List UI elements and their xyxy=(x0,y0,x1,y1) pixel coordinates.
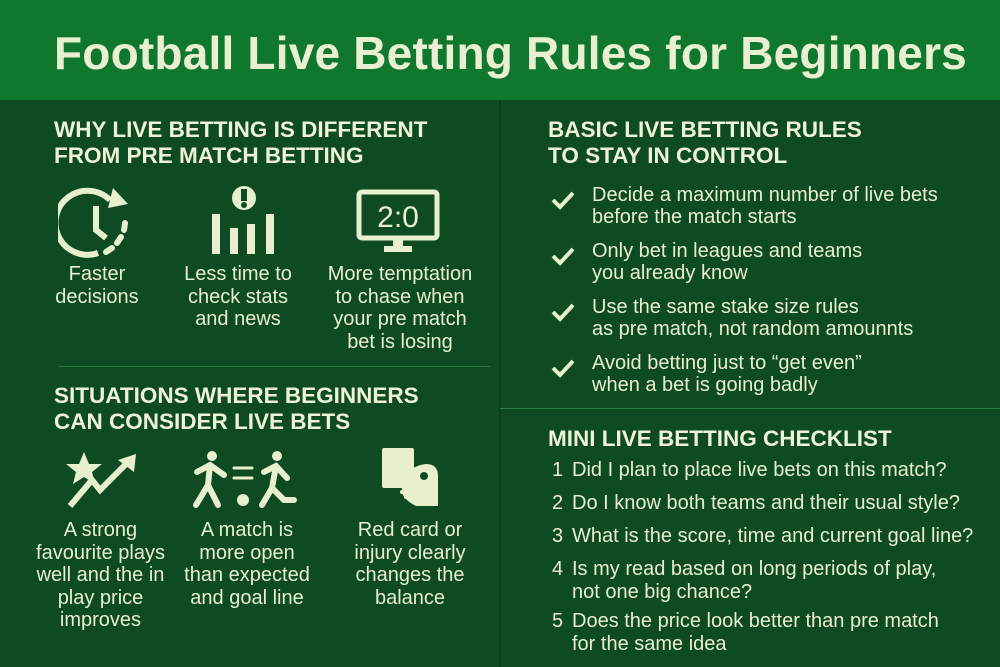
caption: match open: more open xyxy=(199,542,295,564)
item 4 xyxy=(552,558,936,603)
icon: star trend xyxy=(66,452,136,508)
rule 2 xyxy=(552,240,862,284)
icon: red card xyxy=(382,448,438,506)
caption: faster decisions xyxy=(55,263,139,308)
rule 2: you already know xyxy=(592,262,748,284)
rule 3 xyxy=(552,296,913,340)
caption: more temptation xyxy=(328,263,472,352)
caption: match open: A match is xyxy=(201,519,293,541)
heading: basic rules xyxy=(548,117,862,168)
heading: basic rules: TO STAY IN CONTROL xyxy=(548,143,787,168)
icon: stats alert xyxy=(212,186,274,254)
heading: situations: SITUATIONS WHERE BEGINNERS xyxy=(54,383,419,408)
heading: why live betting different: FROM PRE MATCH BETTING xyxy=(54,143,364,168)
item 3: 3 xyxy=(552,525,563,547)
item 4: not one big chance? xyxy=(572,581,752,603)
rule 4 xyxy=(552,352,862,396)
rule 4: when a bet is going badly xyxy=(592,374,818,396)
caption: less time: check stats xyxy=(188,286,288,308)
rule 1 xyxy=(552,184,938,228)
caption: faster decisions: Faster xyxy=(69,263,125,285)
item 4: Is my read based on long periods of play, xyxy=(572,558,936,580)
item 3: What is the score, time and current goal line? xyxy=(572,525,973,547)
caption: more temptation: More temptation xyxy=(328,263,472,285)
heading: why live betting different xyxy=(54,117,428,168)
item 2: Do I know both teams and their usual style? xyxy=(572,492,960,514)
caption: strong favourite xyxy=(36,519,165,631)
caption: more temptation: bet is losing xyxy=(347,330,453,352)
caption: red card: balance xyxy=(375,586,445,608)
icon: scoreboard xyxy=(356,190,440,252)
caption: red card: changes the xyxy=(356,564,464,586)
item 5 xyxy=(552,610,939,655)
caption: faster decisions: decisions xyxy=(55,286,139,308)
heading: why live betting different: WHY LIVE BETTING IS DIFFERENT xyxy=(54,117,427,142)
rule 1: Decide a maximum number of live bets xyxy=(592,184,938,206)
caption: strong favourite: well and the in xyxy=(37,564,164,586)
item 5: 5 xyxy=(552,610,563,632)
icon: clock xyxy=(58,188,128,258)
item 5: for the same idea xyxy=(572,633,727,655)
item 1: 1 xyxy=(552,459,563,481)
icon: scoreboard: 2:0 xyxy=(377,201,419,234)
rules list xyxy=(552,184,938,396)
title: Football Live Betting Rules for Beginners xyxy=(54,27,967,79)
caption: more temptation: to chase when xyxy=(336,286,464,308)
caption: strong favourite: improves xyxy=(60,609,141,631)
rule 1: before the match starts xyxy=(592,206,797,228)
caption: less time: and news xyxy=(195,308,281,330)
caption: match open: than expected xyxy=(184,564,310,586)
rule 3: as pre match, not random amounnts xyxy=(592,318,913,340)
heading: checklist: MINI LIVE BETTING CHECKLIST xyxy=(548,426,892,451)
caption: red card xyxy=(354,519,466,608)
caption: less time: Less time to xyxy=(184,263,292,285)
caption: match open xyxy=(184,519,310,608)
rule 2: Only bet in leagues and teams xyxy=(592,240,862,262)
caption: more temptation: your pre match xyxy=(333,308,467,330)
heading: situations: CAN CONSIDER LIVE BETS xyxy=(54,409,350,434)
caption: red card: injury clearly xyxy=(354,542,466,564)
title xyxy=(0,0,1000,100)
item 4: 4 xyxy=(552,558,563,580)
item 2: 2 xyxy=(552,492,563,514)
checklist xyxy=(552,459,973,655)
item 5: Does the price look better than pre match xyxy=(572,610,939,632)
icon: players xyxy=(193,451,297,508)
caption: match open: and goal line xyxy=(190,586,304,608)
item 1: Did I plan to place live bets on this match? xyxy=(572,459,947,481)
rule 3: Use the same stake size rules xyxy=(592,296,859,318)
caption: red card: Red card or xyxy=(358,519,462,541)
rule 4: Avoid betting just to “get even” xyxy=(592,352,862,374)
heading: situations xyxy=(54,383,419,434)
caption: less time xyxy=(184,263,292,330)
caption: strong favourite: favourite plays xyxy=(36,542,165,564)
heading: basic rules: BASIC LIVE BETTING RULES xyxy=(548,117,862,142)
caption: strong favourite: play price xyxy=(58,586,143,608)
caption: strong favourite: A strong xyxy=(64,519,137,541)
